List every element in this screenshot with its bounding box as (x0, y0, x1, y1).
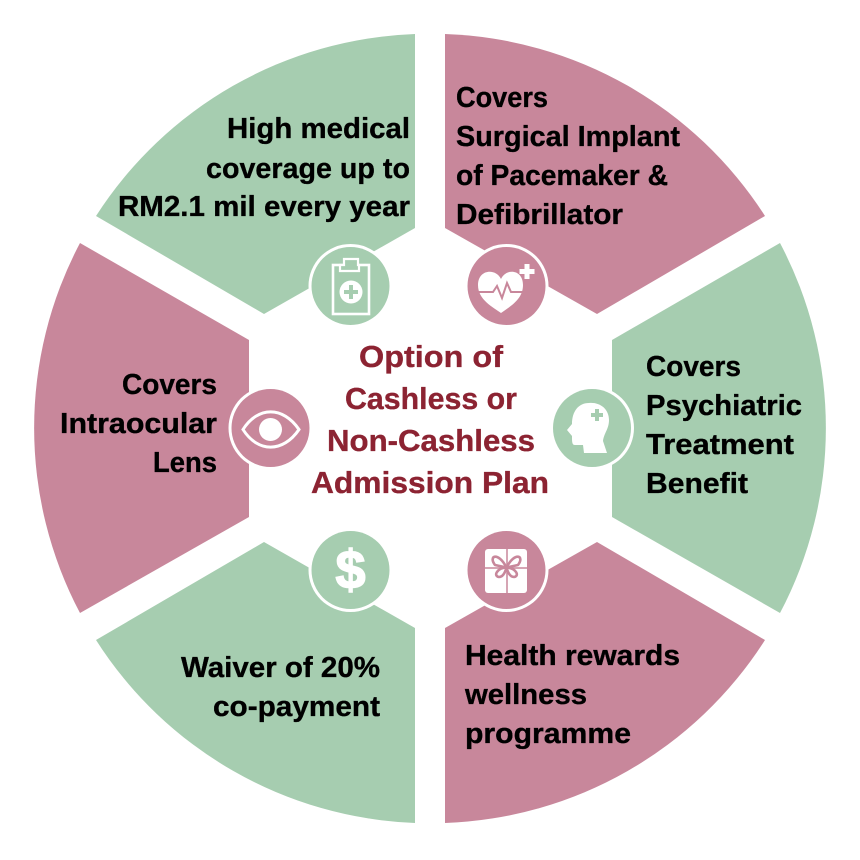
icon: gift (464, 528, 548, 612)
panel: surgical implant: of Pacemaker & (456, 160, 668, 192)
center title: Cashless or (345, 381, 517, 416)
panel: health rewards: Health rewards (465, 640, 680, 672)
panel: surgical implant: Defibrillator (456, 199, 623, 231)
panel: psychiatric treatment: Covers (646, 351, 741, 383)
icon: dollar (308, 528, 392, 612)
panel: psychiatric treatment: Benefit (646, 468, 748, 500)
panel: psychiatric treatment: Treatment (646, 429, 794, 461)
icon: dollar: $ (335, 540, 366, 600)
icon: heart with pulse (464, 244, 548, 328)
icon: clipboard (308, 244, 392, 328)
panel: health rewards (445, 542, 765, 823)
panel: surgical implant (445, 34, 765, 314)
icon: eye (228, 386, 312, 470)
panel: intraocular lens: Intraocular (60, 408, 217, 440)
icon: head with plus (550, 386, 634, 470)
center title: Admission Plan (311, 465, 549, 500)
panel: high medical coverage: High medical (227, 113, 410, 145)
panel: health rewards: wellness (464, 679, 587, 711)
panel: intraocular lens: Covers (122, 369, 217, 401)
panel: high medical coverage: coverage up to (206, 153, 410, 185)
panel: surgical implant: Surgical Implant (456, 121, 680, 153)
panel: surgical implant: Covers (456, 82, 548, 114)
panel: high medical coverage (96, 34, 415, 314)
panel: high medical coverage: RM2.1 mil every year (118, 191, 410, 223)
center title (311, 339, 549, 500)
panel: health rewards: programme (465, 718, 631, 750)
panel: psychiatric treatment: Psychiatric (646, 390, 802, 422)
panel: waiver of co-payment (96, 542, 415, 823)
panel: intraocular lens (34, 243, 249, 613)
panel: waiver of co-payment: Waiver of 20% (181, 652, 380, 684)
center title: Non-Cashless (327, 423, 535, 458)
panel: psychiatric treatment (612, 243, 826, 613)
panel: intraocular lens: Lens (153, 447, 217, 479)
panel: waiver of co-payment: co-payment (213, 691, 380, 723)
center title: Option of (359, 339, 504, 374)
